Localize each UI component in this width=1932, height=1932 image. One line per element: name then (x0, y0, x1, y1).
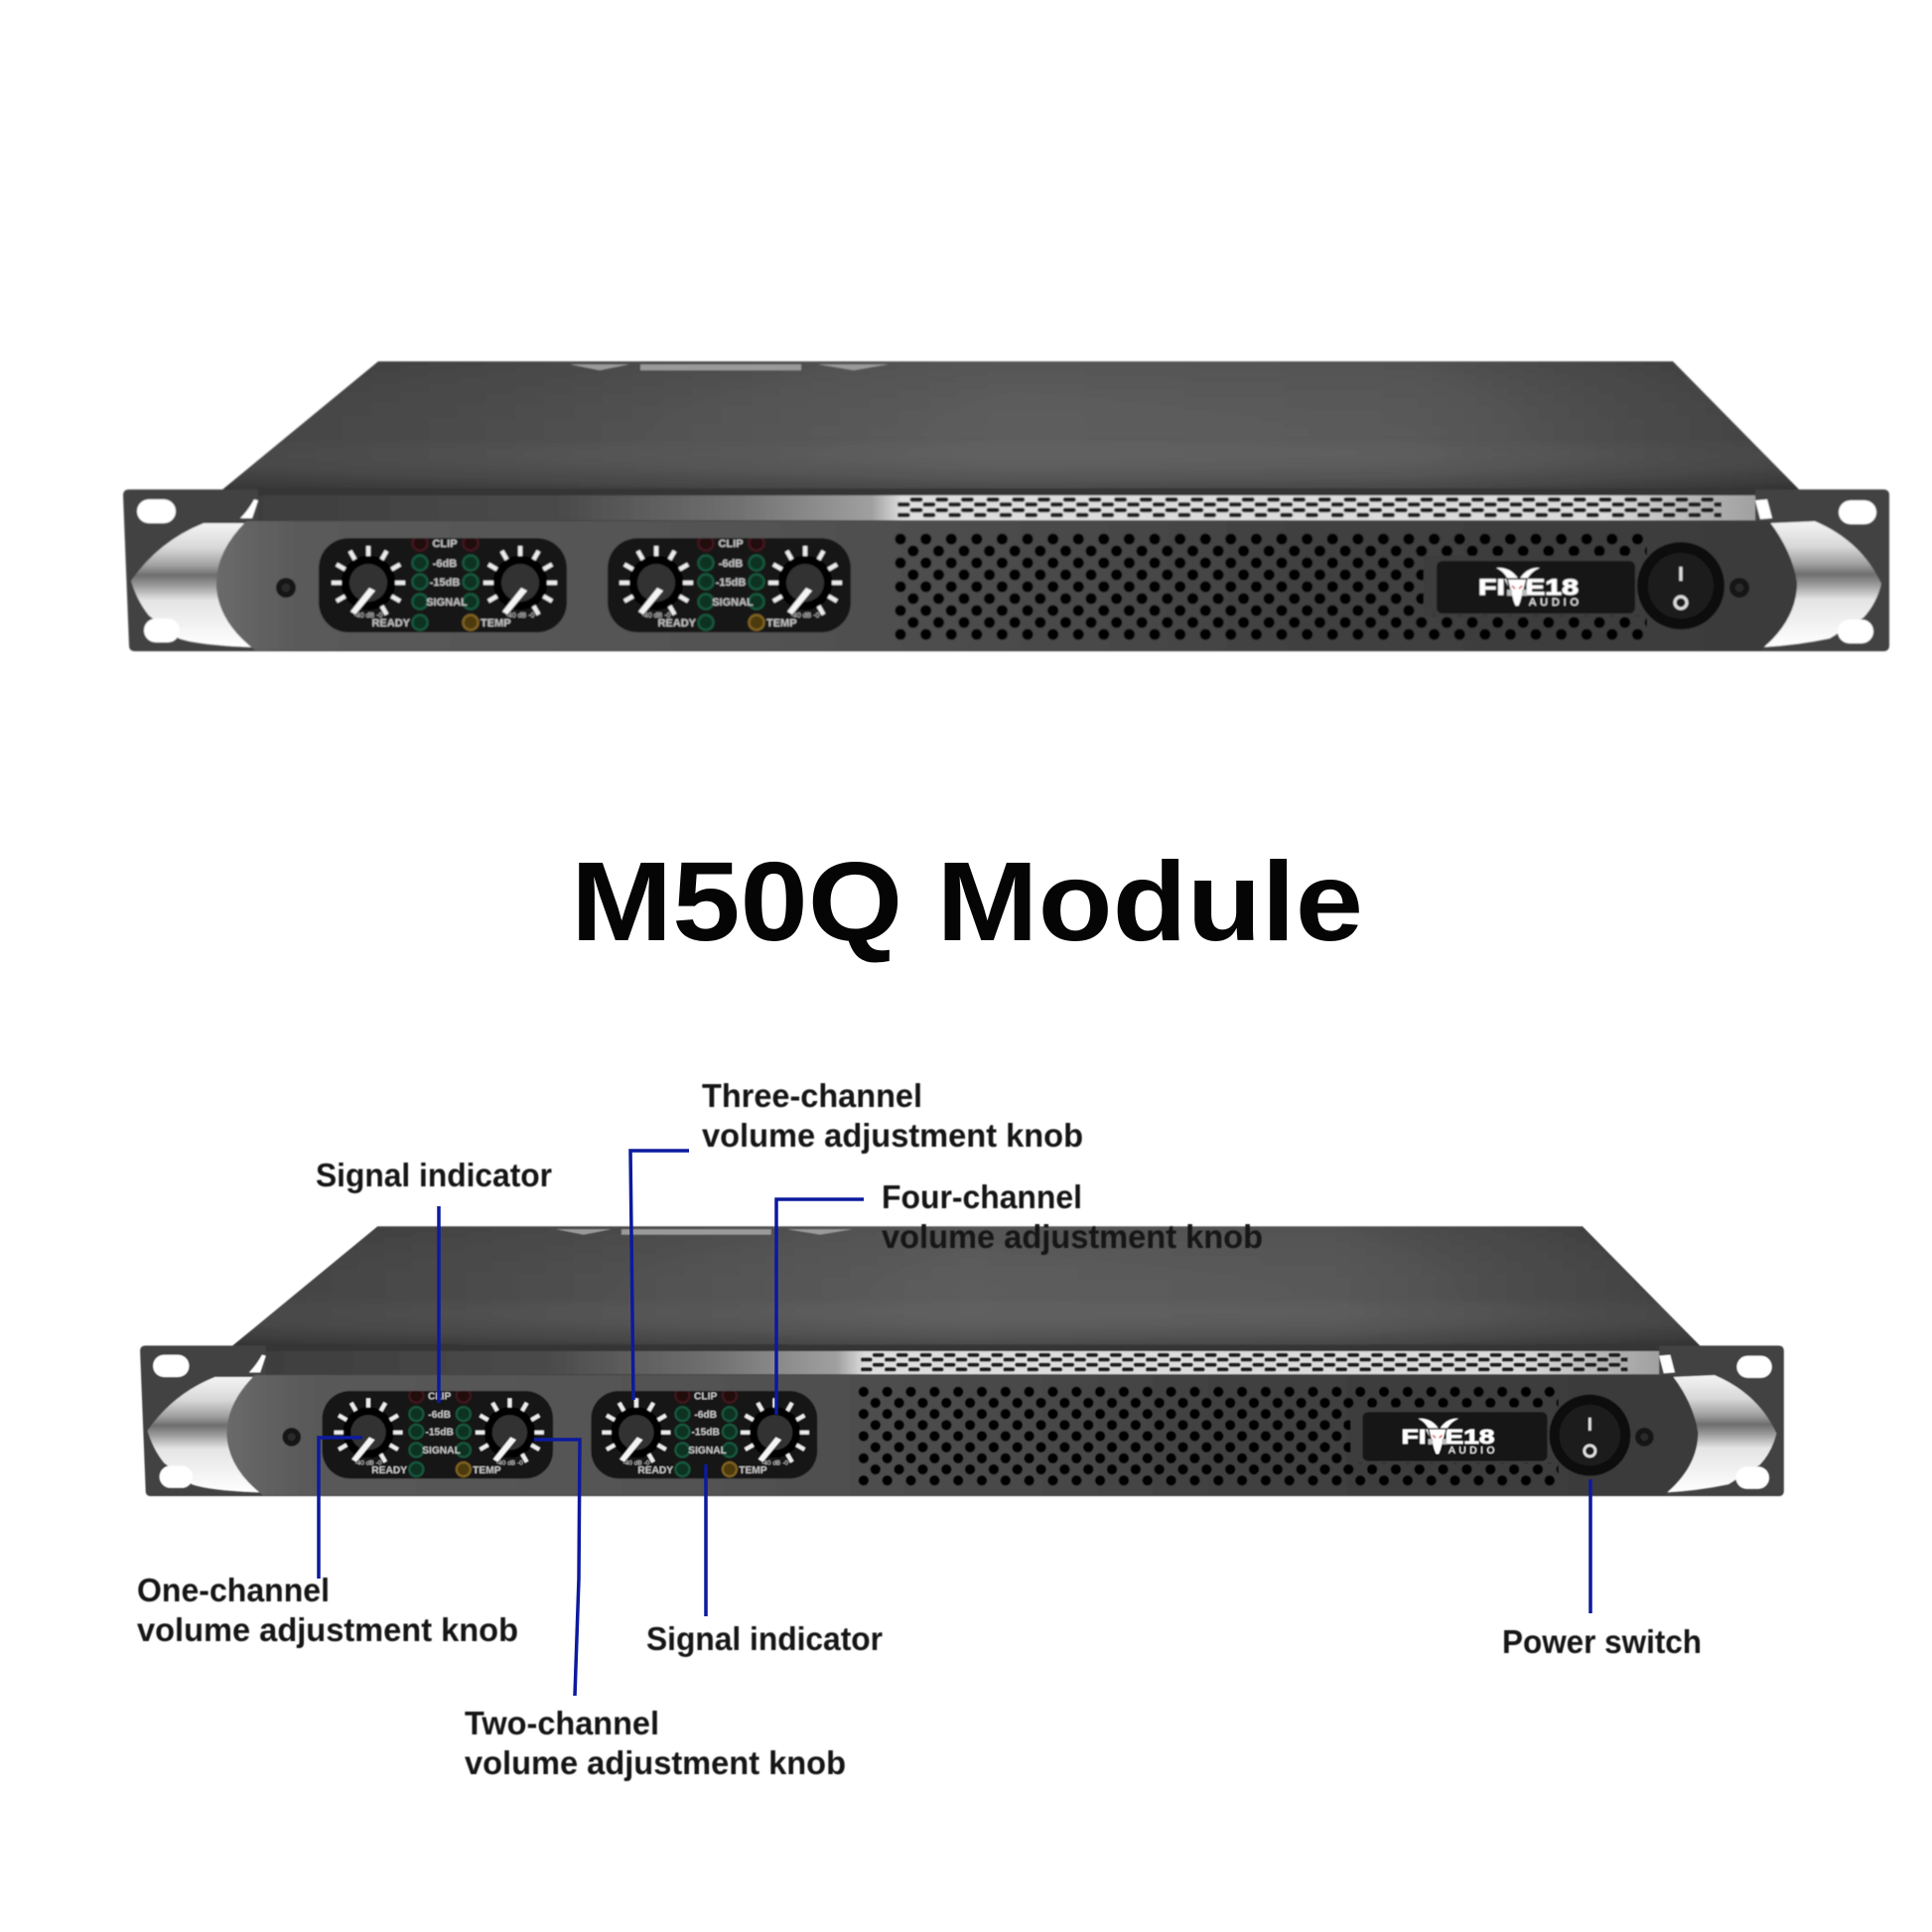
control panel channels 3 and 4: CLIP (718, 538, 744, 550)
left panel screw (282, 1428, 301, 1447)
control panel channels 1 and 2: READY (371, 618, 411, 629)
leader: four-channel knob (776, 1199, 864, 1415)
left chrome handle (148, 1377, 263, 1492)
label: signal indicator top: Signal indicator (316, 1157, 552, 1193)
control panel channels 1 and 2 (322, 1389, 553, 1478)
title: M50Q Module (571, 839, 1363, 964)
left panel screw (276, 578, 296, 598)
control panel channels 1 and 2: CLIP (428, 1391, 451, 1402)
infographic canvas (121, 359, 1890, 1782)
rack mounting flange (140, 1345, 1784, 1496)
control panel channels 3 and 4 (591, 1389, 817, 1478)
control panel channels 1 and 2: -40 dB -0 (506, 613, 535, 620)
control panel channels 1 and 2: -40 dB -0 (354, 613, 383, 620)
control panel channels 3 and 4: SIGNAL (712, 597, 754, 609)
label: two-channel: Two-channel (465, 1705, 659, 1741)
label: two-channel: volume adjustment knob (465, 1744, 846, 1781)
right chrome handle (1760, 521, 1881, 647)
chassis top cover (221, 361, 1800, 490)
label: three-channel (702, 1077, 1083, 1154)
leader: signal indicator top (437, 1206, 441, 1403)
control panel channels 3 and 4: -15dB (716, 577, 746, 589)
FIVE18 AUDIO logo plate: FIVE18 (1402, 1426, 1495, 1449)
chassis top cover (231, 1226, 1701, 1346)
labels (137, 1077, 1702, 1781)
control panel channels 1 and 2: -40 dB -0 (355, 1459, 382, 1466)
label: four-channel: volume adjustment knob (882, 1218, 1263, 1255)
leader: power switch (1588, 1479, 1592, 1613)
label: one-channel: One-channel (137, 1572, 330, 1608)
FIVE18 AUDIO logo plate (1362, 1412, 1548, 1461)
control panel channels 3 and 4: -40 dB -0 (623, 1459, 650, 1466)
power switch (1637, 542, 1725, 629)
control panel channels 1 and 2: TEMP (481, 618, 511, 629)
right panel screw (1635, 1428, 1654, 1447)
amplifier photo: annotated view (140, 1226, 1784, 1496)
right chrome handle (1664, 1375, 1776, 1492)
label: two-channel (465, 1705, 846, 1781)
label: four-channel: Four-channel (882, 1178, 1082, 1215)
FIVE18 AUDIO logo plate: FIVE18 (1478, 575, 1579, 600)
control panel channels 3 and 4: TEMP (766, 618, 797, 629)
power switch (1549, 1395, 1630, 1476)
perforated top strip (258, 488, 1755, 520)
control panel channels 3 and 4 (608, 536, 851, 632)
label: one-channel (137, 1572, 518, 1648)
right panel screw (1729, 578, 1749, 598)
control panel channels 3 and 4: -15dB (691, 1428, 720, 1439)
leader: one-channel knob (319, 1438, 362, 1579)
ventilation grill (858, 1386, 1563, 1486)
control panel channels 1 and 2: TEMP (473, 1465, 501, 1476)
control panel channels 3 and 4: -40 dB -0 (791, 613, 820, 620)
front panel (227, 1375, 1698, 1495)
control panel channels 3 and 4: SIGNAL (688, 1446, 727, 1456)
FIVE18 AUDIO logo plate: AUDIO (1529, 597, 1579, 609)
front panel (216, 521, 1797, 650)
control panel channels 1 and 2: -40 dB -0 (496, 1459, 523, 1466)
flange mounting holes (153, 1355, 1772, 1489)
perforated top strip (266, 1344, 1659, 1374)
control panel channels 1 and 2 (319, 536, 567, 632)
control panel channels 1 and 2: CLIP (432, 538, 458, 550)
label: four-channel (882, 1178, 1263, 1255)
control panel channels 1 and 2: -6dB (428, 1410, 451, 1421)
amplifier photo: top view (123, 361, 1889, 651)
label: three-channel: Three-channel (702, 1077, 922, 1114)
control panel channels 1 and 2: READY (371, 1465, 407, 1476)
label: signal indicator bottom: Signal indicator (646, 1620, 883, 1657)
label: three-channel: volume adjustment knob (702, 1117, 1083, 1154)
control panel channels 3 and 4: READY (657, 618, 697, 629)
callout lines (319, 1151, 1590, 1696)
control panel channels 3 and 4: -6dB (719, 558, 743, 570)
FIVE18 AUDIO logo plate: AUDIO (1449, 1446, 1495, 1456)
FIVE18 AUDIO logo plate (1437, 561, 1635, 614)
control panel channels 3 and 4: TEMP (739, 1465, 767, 1476)
flange mounting holes (137, 499, 1876, 643)
leader: three-channel knob (630, 1151, 689, 1400)
control panel channels 3 and 4: -6dB (694, 1410, 717, 1421)
control panel channels 1 and 2: -15dB (425, 1428, 454, 1439)
label: one-channel: volume adjustment knob (137, 1611, 518, 1648)
control panel channels 3 and 4: CLIP (694, 1391, 718, 1402)
rack mounting flange (123, 489, 1889, 651)
leader: two-channel knob (534, 1440, 580, 1696)
control panel channels 1 and 2: SIGNAL (426, 597, 468, 609)
control panel channels 1 and 2: -15dB (430, 577, 460, 589)
ventilation grill (895, 533, 1652, 640)
control panel channels 3 and 4: READY (637, 1465, 673, 1476)
control panel channels 3 and 4: -40 dB -0 (642, 613, 671, 620)
control panel channels 3 and 4: -40 dB -0 (761, 1459, 788, 1466)
control panel channels 1 and 2: SIGNAL (422, 1446, 461, 1456)
leader: signal indicator bottom (704, 1464, 708, 1616)
control panel channels 1 and 2: -6dB (433, 558, 457, 570)
label: power switch: Power switch (1502, 1623, 1702, 1660)
left chrome handle (131, 523, 255, 647)
